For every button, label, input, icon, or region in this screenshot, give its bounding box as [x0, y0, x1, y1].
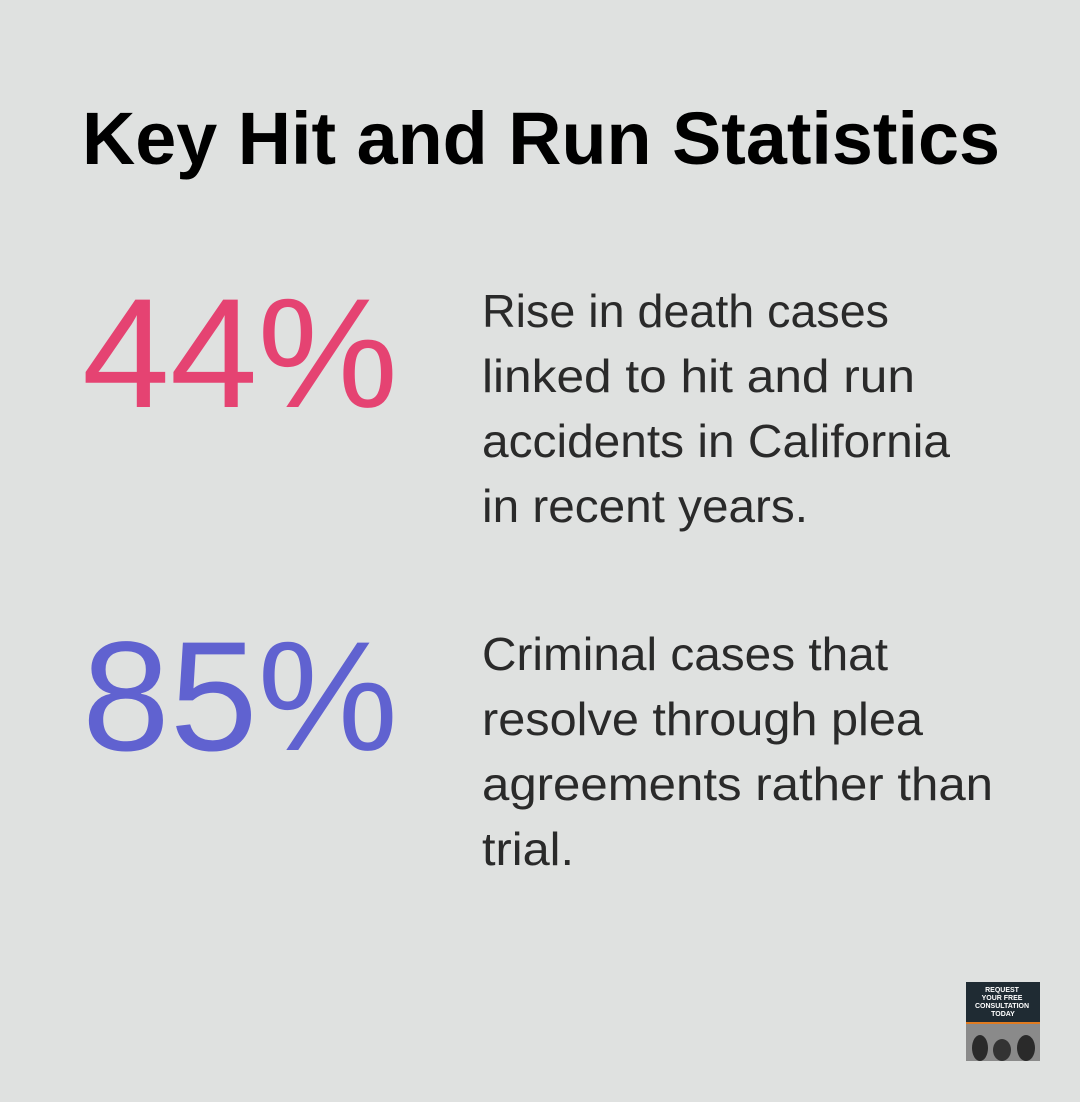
logo: request consultation badge: CONSULTATION: [975, 1003, 1029, 1010]
description 44%: accidents in California: [482, 415, 950, 467]
description 85%: agreements rather than: [482, 758, 993, 810]
logo: request consultation badge: REQUEST: [985, 987, 1020, 994]
description 85%: trial.: [482, 823, 574, 875]
description 85%: resolve through plea: [482, 693, 923, 745]
logo: request consultation badge: YOUR FREE: [982, 995, 1023, 1002]
number 44%: 44%: [82, 267, 398, 441]
description 44%: linked to hit and run: [482, 350, 915, 402]
description 44%: in recent years.: [482, 480, 808, 532]
logo: request consultation badge: [966, 982, 1040, 1061]
number 85%: 85%: [82, 610, 398, 784]
description 85%: Criminal cases that: [482, 628, 888, 680]
logo: request consultation badge: TODAY: [991, 1011, 1015, 1018]
stat: 85%: [82, 610, 1006, 875]
description 44%: Rise in death cases: [482, 285, 889, 337]
title: Key Hit and Run Statistics: [82, 97, 1000, 180]
stat: 44%: [82, 267, 963, 532]
